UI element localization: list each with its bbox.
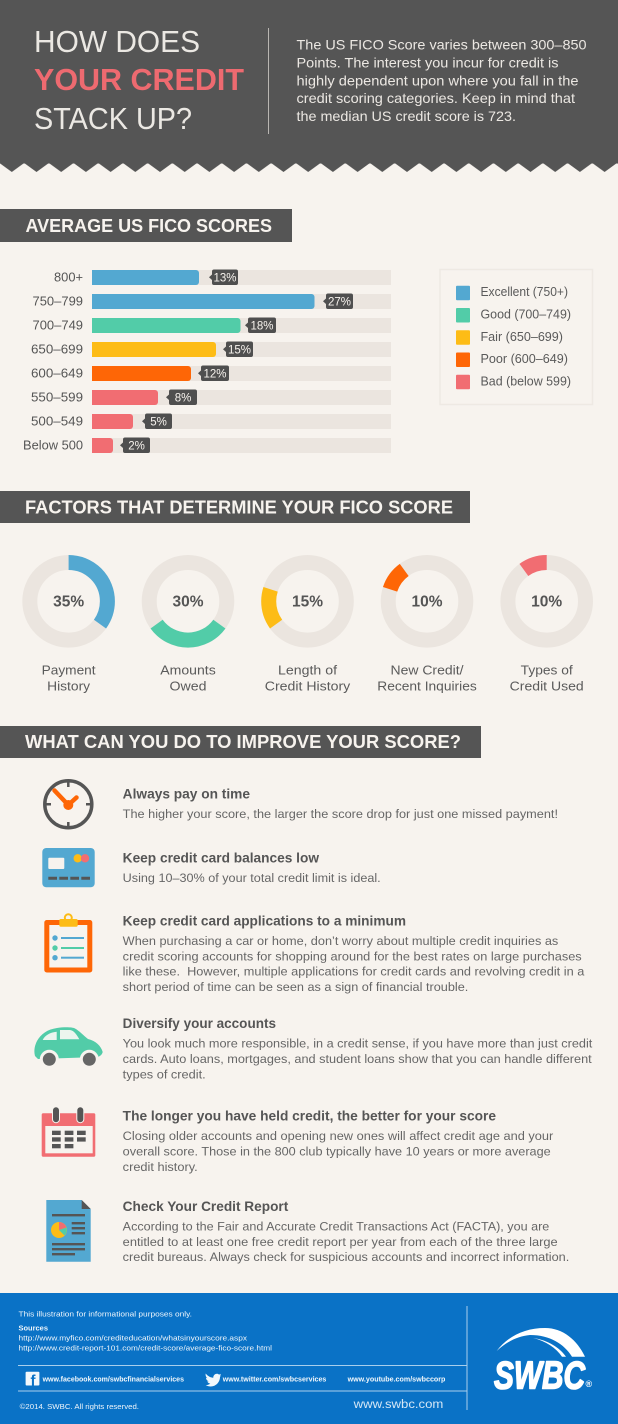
- footer disclaimer and sources: http://www.credit-report-101.com/credit-score/average-fico-score.html: [18, 1344, 272, 1352]
- row 650-699: 650–699: [31, 342, 83, 356]
- tip: applications: When purchasing a car or home, don’t worry about multiple credit inquiries as: [123, 934, 558, 948]
- legend: Good (700–749): [480, 308, 571, 322]
- intro text: credit scoring categories. Keep in mind that: [296, 90, 575, 106]
- tip: diversify: Diversify your accounts: [123, 1016, 276, 1031]
- tip: diversify: [123, 1016, 593, 1081]
- logo: SWBC: [494, 1328, 592, 1398]
- row 600-649: 600–649: [31, 366, 83, 380]
- donut: types of credit: [508, 562, 586, 694]
- row 500-549: 5%: [150, 416, 167, 428]
- section heading: improve: [0, 726, 481, 758]
- icon: clipboard: [47, 914, 90, 970]
- twitter link: www.twitter.com/swbcservices: [222, 1374, 326, 1383]
- bar chart: [23, 270, 391, 453]
- icon: twitter: [206, 1374, 221, 1386]
- intro text: Points. The interest you incur for credit is: [296, 54, 558, 70]
- title: STACK UP?: [34, 102, 192, 136]
- tip: longer credit: credit history.: [123, 1160, 198, 1174]
- legend: Fair (650–699): [480, 330, 563, 344]
- icon: credit report: [46, 1200, 91, 1262]
- donut: amounts owed: Owed: [170, 678, 206, 694]
- row 600-649: 12%: [203, 368, 227, 380]
- row 700-749: [32, 318, 391, 333]
- donut: new credit: [377, 562, 477, 694]
- icon: clock: [45, 781, 92, 828]
- footer disclaimer and sources: Sources: [18, 1324, 48, 1332]
- youtube link: www.youtube.com/swbccorp: [347, 1374, 446, 1383]
- tip: check report: According to the Fair and Accurate Credit Transactions Act (FACTA), you are: [123, 1220, 549, 1234]
- tip: longer credit: Closing older accounts and opening new ones will affect credit age and your: [123, 1129, 553, 1143]
- icon: facebook: f: [30, 1372, 36, 1390]
- logo: SWBC: ®: [586, 1379, 592, 1389]
- title: HOW DOES: [34, 25, 200, 59]
- row 750-799: 27%: [328, 296, 351, 308]
- footer: [0, 1293, 618, 1424]
- tip: check report: Check Your Credit Report: [123, 1199, 289, 1214]
- donut: length of credit history: Length of: [278, 662, 337, 678]
- donut: amounts owed: Amounts: [160, 662, 216, 678]
- tip: balances low: Using 10–30% of your total credit limit is ideal.: [123, 871, 381, 885]
- row 650-699: [31, 342, 391, 357]
- tip: applications: Keep credit card applications to a minimum: [123, 913, 406, 928]
- tip: check report: entitled to at least one free credit report per year from each of the three large: [123, 1235, 558, 1249]
- row 550-599: [31, 390, 391, 405]
- donut: types of credit: Credit Used: [510, 678, 584, 694]
- donut: new credit: 10%: [411, 594, 443, 610]
- legend: Excellent (750+): [480, 285, 568, 299]
- section heading: factors: FACTORS THAT DETERMINE YOUR FICO SCORE: [25, 498, 453, 518]
- facebook link: www.facebook.com/swbcfinancialservices: [42, 1374, 184, 1383]
- tip: balances low: [123, 851, 381, 885]
- row 550-599: 8%: [175, 392, 191, 404]
- section heading: average scores: AVERAGE US FICO SCORES: [26, 216, 272, 236]
- logo: SWBC: SWBC: [494, 1354, 586, 1398]
- tip: diversify: types of credit.: [123, 1067, 206, 1081]
- tip: longer credit: The longer you have held credit, the better for your score: [123, 1109, 496, 1124]
- donut: types of credit: 10%: [531, 594, 562, 610]
- title: YOUR CREDIT: [34, 63, 244, 97]
- tip: pay on time: Always pay on time: [123, 786, 250, 801]
- legend: Poor (600–649): [480, 352, 568, 366]
- row below 500: Below 500: [23, 438, 83, 452]
- donut: payment history: History: [47, 678, 91, 694]
- section heading: average scores: [0, 209, 292, 242]
- row below 500: 2%: [128, 440, 145, 452]
- tip: applications: short period of time can be seen as a sign of financial trouble.: [123, 980, 468, 994]
- donut: amounts owed: [149, 562, 227, 694]
- tip: check report: credit bureaus. Always check for suspicious accounts and incorrect information.: [123, 1250, 569, 1264]
- header banner: [0, 0, 618, 172]
- donut: amounts owed: 30%: [172, 594, 204, 610]
- donut: payment history: 35%: [53, 594, 84, 610]
- tip: longer credit: overall score. Those in the 800 club typically have 10 years or more average: [123, 1145, 551, 1159]
- icon: credit card: [42, 848, 95, 887]
- donut: length of credit history: 15%: [292, 594, 323, 610]
- tip: check report: [123, 1199, 569, 1264]
- row 700-749: 18%: [250, 320, 274, 332]
- tip: pay on time: [123, 786, 558, 821]
- donut: payment history: Payment: [42, 662, 96, 678]
- tip: pay on time: The higher your score, the larger the score drop for just one missed payment!: [123, 807, 558, 821]
- tip: longer credit: [123, 1109, 553, 1174]
- row 800+: [54, 270, 391, 285]
- icon: calendar: [42, 1107, 95, 1157]
- section heading: improve: WHAT CAN YOU DO TO IMPROVE YOUR SCORE?: [25, 732, 461, 752]
- tip: diversify: cards. Auto loans, mortgages, and student loans show that you can handle different: [123, 1052, 592, 1066]
- tip: applications: credit scoring accounts for shopping around for the best rates on large purchases: [123, 949, 582, 963]
- tip: applications: like these. However, multiple applications for credit cards and revolving credit in a: [123, 965, 584, 979]
- row 650-699: 15%: [228, 344, 251, 356]
- donut: types of credit: Types of: [521, 662, 573, 678]
- footer disclaimer and sources: http://www.myfico.com/crediteducation/whatsinyourscore.aspx: [18, 1334, 247, 1342]
- row 750-799: 750–799: [32, 294, 83, 308]
- tip: balances low: Keep credit card balances low: [123, 851, 320, 866]
- row 550-599: 550–599: [31, 390, 83, 404]
- tip: diversify: You look much more responsible, in a credit sense, if you have more than just credit: [123, 1036, 593, 1050]
- icon: facebook: [26, 1372, 39, 1390]
- intro text: [296, 36, 587, 124]
- section heading: factors: [0, 491, 470, 523]
- donut: new credit: Recent Inquiries: [377, 678, 477, 694]
- row 500-549: 500–549: [31, 414, 83, 428]
- row 500-549: [31, 414, 391, 429]
- donut: payment history: [30, 562, 107, 694]
- intro text: highly dependent upon where you fall in the: [296, 72, 579, 88]
- donut: length of credit history: Credit History: [265, 678, 351, 694]
- row 750-799: [32, 294, 391, 309]
- title: [34, 25, 244, 136]
- row below 500: [23, 438, 391, 453]
- row 800+: 800+: [54, 270, 83, 284]
- icon: car: [34, 1027, 103, 1069]
- website: www.swbc.com: [352, 1399, 443, 1411]
- intro text: The US FICO Score varies between 300–850: [296, 36, 587, 52]
- donut: new credit: New Credit/: [390, 662, 464, 678]
- row 600-649: [31, 366, 391, 381]
- intro text: the median US credit score is 723.: [296, 108, 516, 124]
- copyright: ©2014. SWBC. All rights reserved.: [20, 1402, 139, 1411]
- footer disclaimer and sources: [18, 1310, 272, 1352]
- donut: length of credit history: [265, 562, 351, 694]
- footer disclaimer and sources: This illustration for informational purposes only.: [18, 1310, 192, 1318]
- legend: Bad (below 599): [480, 374, 571, 388]
- row 800+: 13%: [213, 272, 237, 284]
- tip: applications: [123, 913, 584, 994]
- row 700-749: 700–749: [32, 318, 83, 332]
- legend: [440, 270, 592, 404]
